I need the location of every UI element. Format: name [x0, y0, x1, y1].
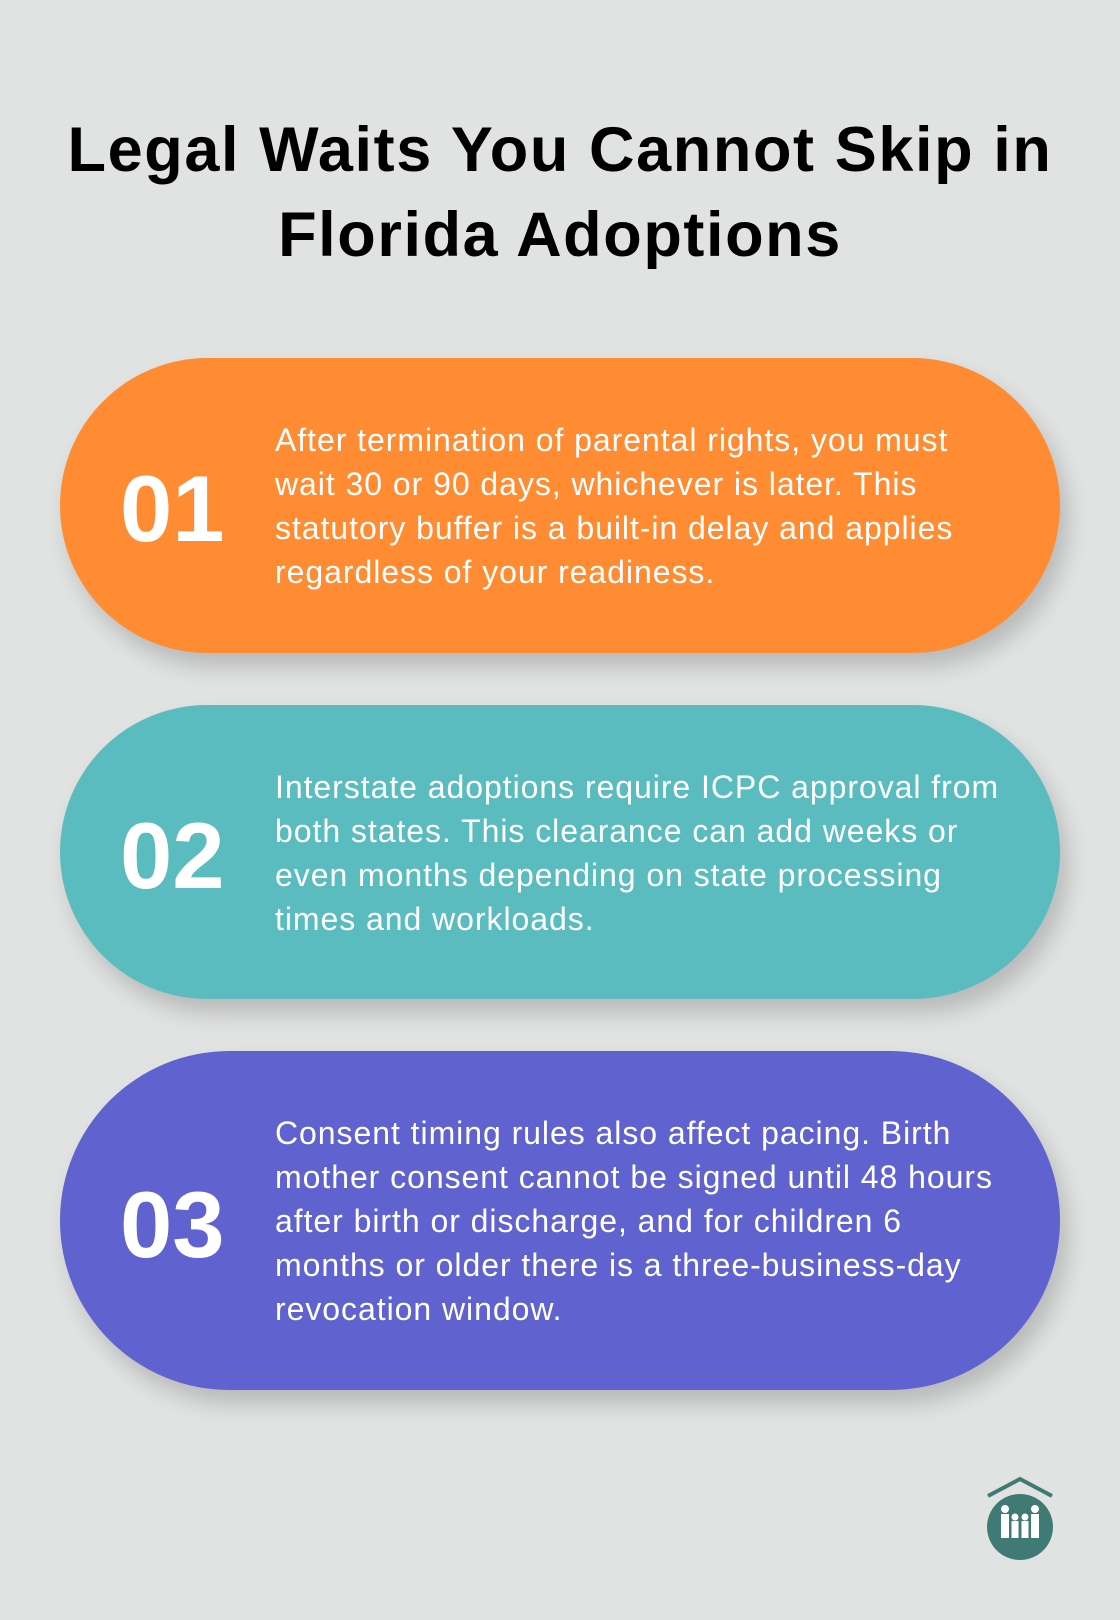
text 03 — [275, 1115, 993, 1327]
text 03: revocation window. — [275, 1291, 562, 1327]
text 02: even months depending on state processing — [275, 857, 942, 893]
text 02: both states. This clearance can add weeks or — [275, 813, 958, 849]
text 01: wait 30 or 90 days, whichever is later. This — [275, 466, 917, 502]
text 03: after birth or discharge, and for children 6 — [275, 1203, 902, 1239]
text 02: times and workloads. — [275, 901, 595, 937]
text 03: mother consent cannot be signed until 48 hours — [275, 1159, 993, 1195]
panel: step 01 — [60, 358, 1060, 653]
number 02: 02 — [120, 803, 225, 908]
text 01: regardless of your readiness. — [275, 554, 715, 590]
number 03: 03 — [120, 1172, 225, 1277]
text 01: After termination of parental rights, you must — [275, 422, 948, 458]
panel: step 03 — [60, 1051, 1060, 1390]
title — [68, 115, 1052, 270]
text 02: Interstate adoptions require ICPC approval from — [275, 769, 999, 805]
panel: step 02 — [60, 705, 1060, 999]
text 01: statutory buffer is a built-in delay and applies — [275, 510, 953, 546]
text 01 — [275, 422, 953, 590]
title: Florida Adoptions — [278, 200, 842, 270]
text 03: months or older there is a three-business-day — [275, 1247, 962, 1283]
title: Legal Waits You Cannot Skip in — [68, 115, 1052, 185]
text 02 — [275, 769, 999, 937]
number 01: 01 — [120, 456, 225, 561]
icon: logo — [987, 1476, 1053, 1560]
text 03: Consent timing rules also affect pacing. Birth — [275, 1115, 951, 1151]
